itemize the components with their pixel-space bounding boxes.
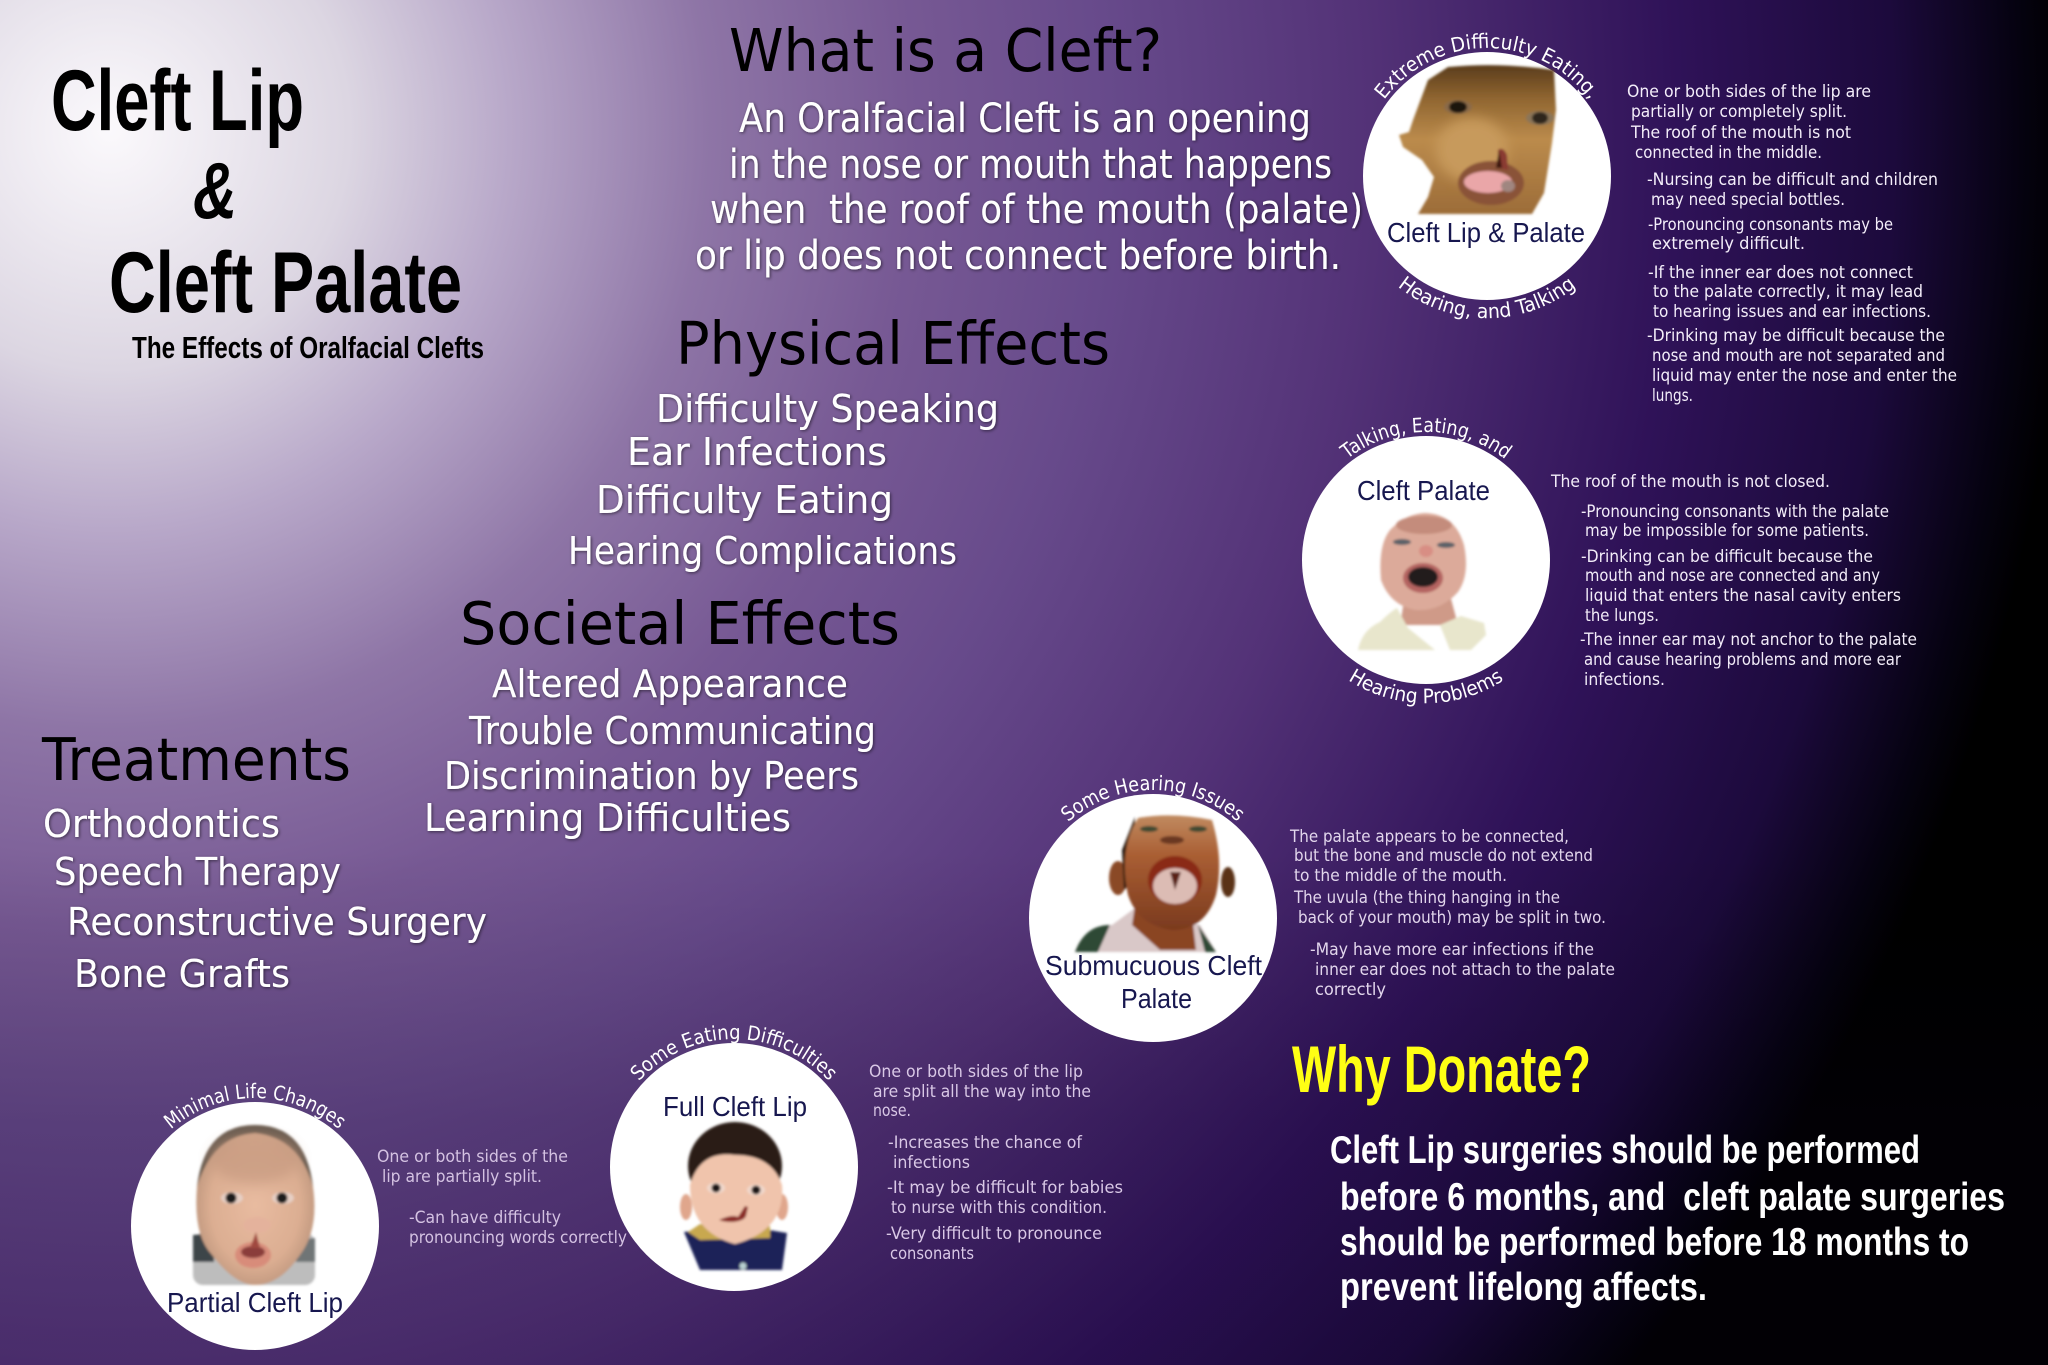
donation text: prevent lifelong affects. xyxy=(1340,1266,1707,1309)
panel: cleft palate xyxy=(1302,418,1917,706)
condition label: Cleft Palate xyxy=(1357,475,1490,506)
condition label: Cleft Lip & Palate xyxy=(1387,217,1585,248)
condition label: Submucuous Cleft xyxy=(1045,950,1262,981)
description: to nurse with this condition. xyxy=(891,1198,1107,1218)
description: -It may be difficult for babies xyxy=(887,1178,1123,1198)
description: back of your mouth) may be split in two. xyxy=(1298,908,1606,928)
heading: societal effects: Societal Effects xyxy=(460,589,900,658)
definition text: An Oralfacial Cleft is an opening xyxy=(739,96,1311,142)
treatments list: Speech Therapy xyxy=(54,850,341,894)
description: mouth and nose are connected and any xyxy=(1585,566,1880,586)
description: The palate appears to be connected, xyxy=(1289,827,1569,847)
description: liquid may enter the nose and enter the xyxy=(1652,366,1957,386)
description: may be impossible for some patients. xyxy=(1585,521,1869,541)
circle badge xyxy=(1029,794,1277,1042)
description: liquid that enters the nasal cavity enters xyxy=(1585,586,1901,606)
description: -Can have difficulty xyxy=(409,1208,561,1228)
societal effects list: Trouble Communicating xyxy=(468,709,876,753)
heading: treatments: Treatments xyxy=(41,725,351,794)
description: lip are partially split. xyxy=(382,1167,542,1187)
description: -Increases the chance of xyxy=(888,1133,1083,1153)
curved caption top: Talking, Eating, and xyxy=(1338,418,1513,458)
panel: partial cleft lip xyxy=(131,1082,627,1350)
description: The roof of the mouth is not xyxy=(1630,123,1851,143)
description: -Drinking can be difficult because the xyxy=(1581,547,1873,567)
description: partially or completely split. xyxy=(1631,102,1847,122)
description: -Pronouncing consonants with the palate xyxy=(1581,502,1889,522)
main title: The Effects of Oralfacial Clefts xyxy=(132,330,484,365)
main title: Cleft Lip xyxy=(51,53,304,149)
description xyxy=(869,1062,1123,1264)
description: infections xyxy=(893,1153,970,1173)
condition label: Palate xyxy=(1121,983,1192,1014)
treatments list xyxy=(43,802,487,996)
description: The uvula (the thing hanging in the xyxy=(1293,888,1560,908)
heading: why donate: Why Donate? xyxy=(1292,1032,1591,1106)
description xyxy=(1550,472,1917,690)
description: inner ear does not attach to the palate xyxy=(1315,960,1615,980)
curved caption bottom: Hearing, and Talking xyxy=(1398,276,1576,320)
physical effects list: Ear Infections xyxy=(627,430,887,474)
treatments list: Orthodontics xyxy=(43,802,280,846)
description: -Drinking may be difficult because the xyxy=(1647,326,1945,346)
description: -If the inner ear does not connect xyxy=(1648,263,1913,283)
description: One or both sides of the lip xyxy=(869,1062,1083,1082)
description: to the middle of the mouth. xyxy=(1294,866,1507,886)
description: The roof of the mouth is not closed. xyxy=(1550,472,1830,492)
curved caption top: Extreme Difficulty Eating, xyxy=(1374,32,1594,99)
panel: cleft lip and palate xyxy=(1363,32,1957,406)
societal effects list: Learning Difficulties xyxy=(424,796,791,840)
description: and cause hearing problems and more ear xyxy=(1584,650,1901,670)
section: societal effects xyxy=(424,589,900,840)
description: the lungs. xyxy=(1585,606,1659,626)
definition text xyxy=(695,96,1363,279)
section: why donate xyxy=(1292,1032,2005,1309)
societal effects list: Discrimination by Peers xyxy=(444,754,859,798)
section: what is a cleft xyxy=(695,16,1363,279)
curved caption bottom: Hearing Problems xyxy=(1350,668,1502,706)
condition label xyxy=(1045,950,1262,1014)
curved caption top: Some Eating Difficulties xyxy=(630,1025,836,1080)
treatments list: Bone Grafts xyxy=(74,952,290,996)
description xyxy=(1627,82,1957,406)
circle badge xyxy=(1363,52,1611,300)
description: to the palate correctly, it may lead xyxy=(1653,282,1923,302)
photo: child with cleft lip and palate xyxy=(1399,65,1556,214)
heading: physical effects: Physical Effects xyxy=(676,309,1110,378)
description: consonants xyxy=(890,1244,974,1264)
photo: baby with partial cleft lip xyxy=(193,1125,315,1285)
description: -Pronouncing consonants may be xyxy=(1648,215,1893,235)
curved caption top: Some Hearing Issues xyxy=(1061,774,1244,821)
curved caption top: Minimal Life Changes xyxy=(163,1082,345,1128)
description: pronouncing words correctly xyxy=(409,1228,627,1248)
description: -Nursing can be difficult and children xyxy=(1647,170,1938,190)
definition text: in the nose or mouth that happens xyxy=(729,142,1332,188)
condition label: Full Cleft Lip xyxy=(663,1091,807,1122)
description: extremely difficult. xyxy=(1652,234,1805,254)
description: One or both sides of the lip are xyxy=(1627,82,1871,102)
physical effects list: Hearing Complications xyxy=(568,529,957,573)
condition label: Partial Cleft Lip xyxy=(167,1287,343,1318)
main title: Cleft Palate xyxy=(109,235,462,331)
description xyxy=(377,1147,627,1248)
description: may need special bottles. xyxy=(1651,190,1845,210)
description: connected in the middle. xyxy=(1635,143,1822,163)
societal effects list: Altered Appearance xyxy=(492,662,848,706)
circle badge xyxy=(610,1043,858,1291)
section: treatments xyxy=(41,725,487,996)
panel: submucuous cleft palate xyxy=(1029,774,1615,1042)
description: nose. xyxy=(873,1101,911,1121)
donation text xyxy=(1330,1129,2005,1309)
definition text: when the roof of the mouth (palate) xyxy=(710,187,1363,233)
photo: baby with full cleft lip xyxy=(680,1122,788,1270)
main title xyxy=(51,53,484,365)
circle badge xyxy=(131,1102,379,1350)
physical effects list xyxy=(568,387,999,573)
description xyxy=(1289,827,1615,1000)
description: One or both sides of the xyxy=(377,1147,568,1167)
description: lungs. xyxy=(1652,386,1693,406)
description: infections. xyxy=(1584,670,1665,690)
definition text: or lip does not connect before birth. xyxy=(695,233,1341,279)
heading: what is a cleft: What is a Cleft? xyxy=(729,16,1162,85)
physical effects list: Difficulty Speaking xyxy=(656,387,999,431)
description: are split all the way into the xyxy=(873,1082,1091,1102)
description: -May have more ear infections if the xyxy=(1310,940,1594,960)
main title: & xyxy=(193,146,237,235)
description: to hearing issues and ear infections. xyxy=(1653,302,1931,322)
section: physical effects xyxy=(568,309,1110,573)
description: but the bone and muscle do not extend xyxy=(1294,846,1593,866)
circle badge xyxy=(1302,436,1550,684)
photo: baby with cleft palate xyxy=(1358,513,1486,650)
description: nose and mouth are not separated and xyxy=(1652,346,1945,366)
description: -Very difficult to pronounce xyxy=(886,1224,1102,1244)
description: -The inner ear may not anchor to the palate xyxy=(1580,630,1917,650)
physical effects list: Difficulty Eating xyxy=(596,478,893,522)
treatments list: Reconstructive Surgery xyxy=(67,900,487,944)
description: correctly xyxy=(1315,980,1386,1000)
photo: child with submucuous cleft palate xyxy=(1075,815,1235,952)
panel: full cleft lip xyxy=(610,1025,1123,1291)
societal effects list xyxy=(424,662,876,840)
